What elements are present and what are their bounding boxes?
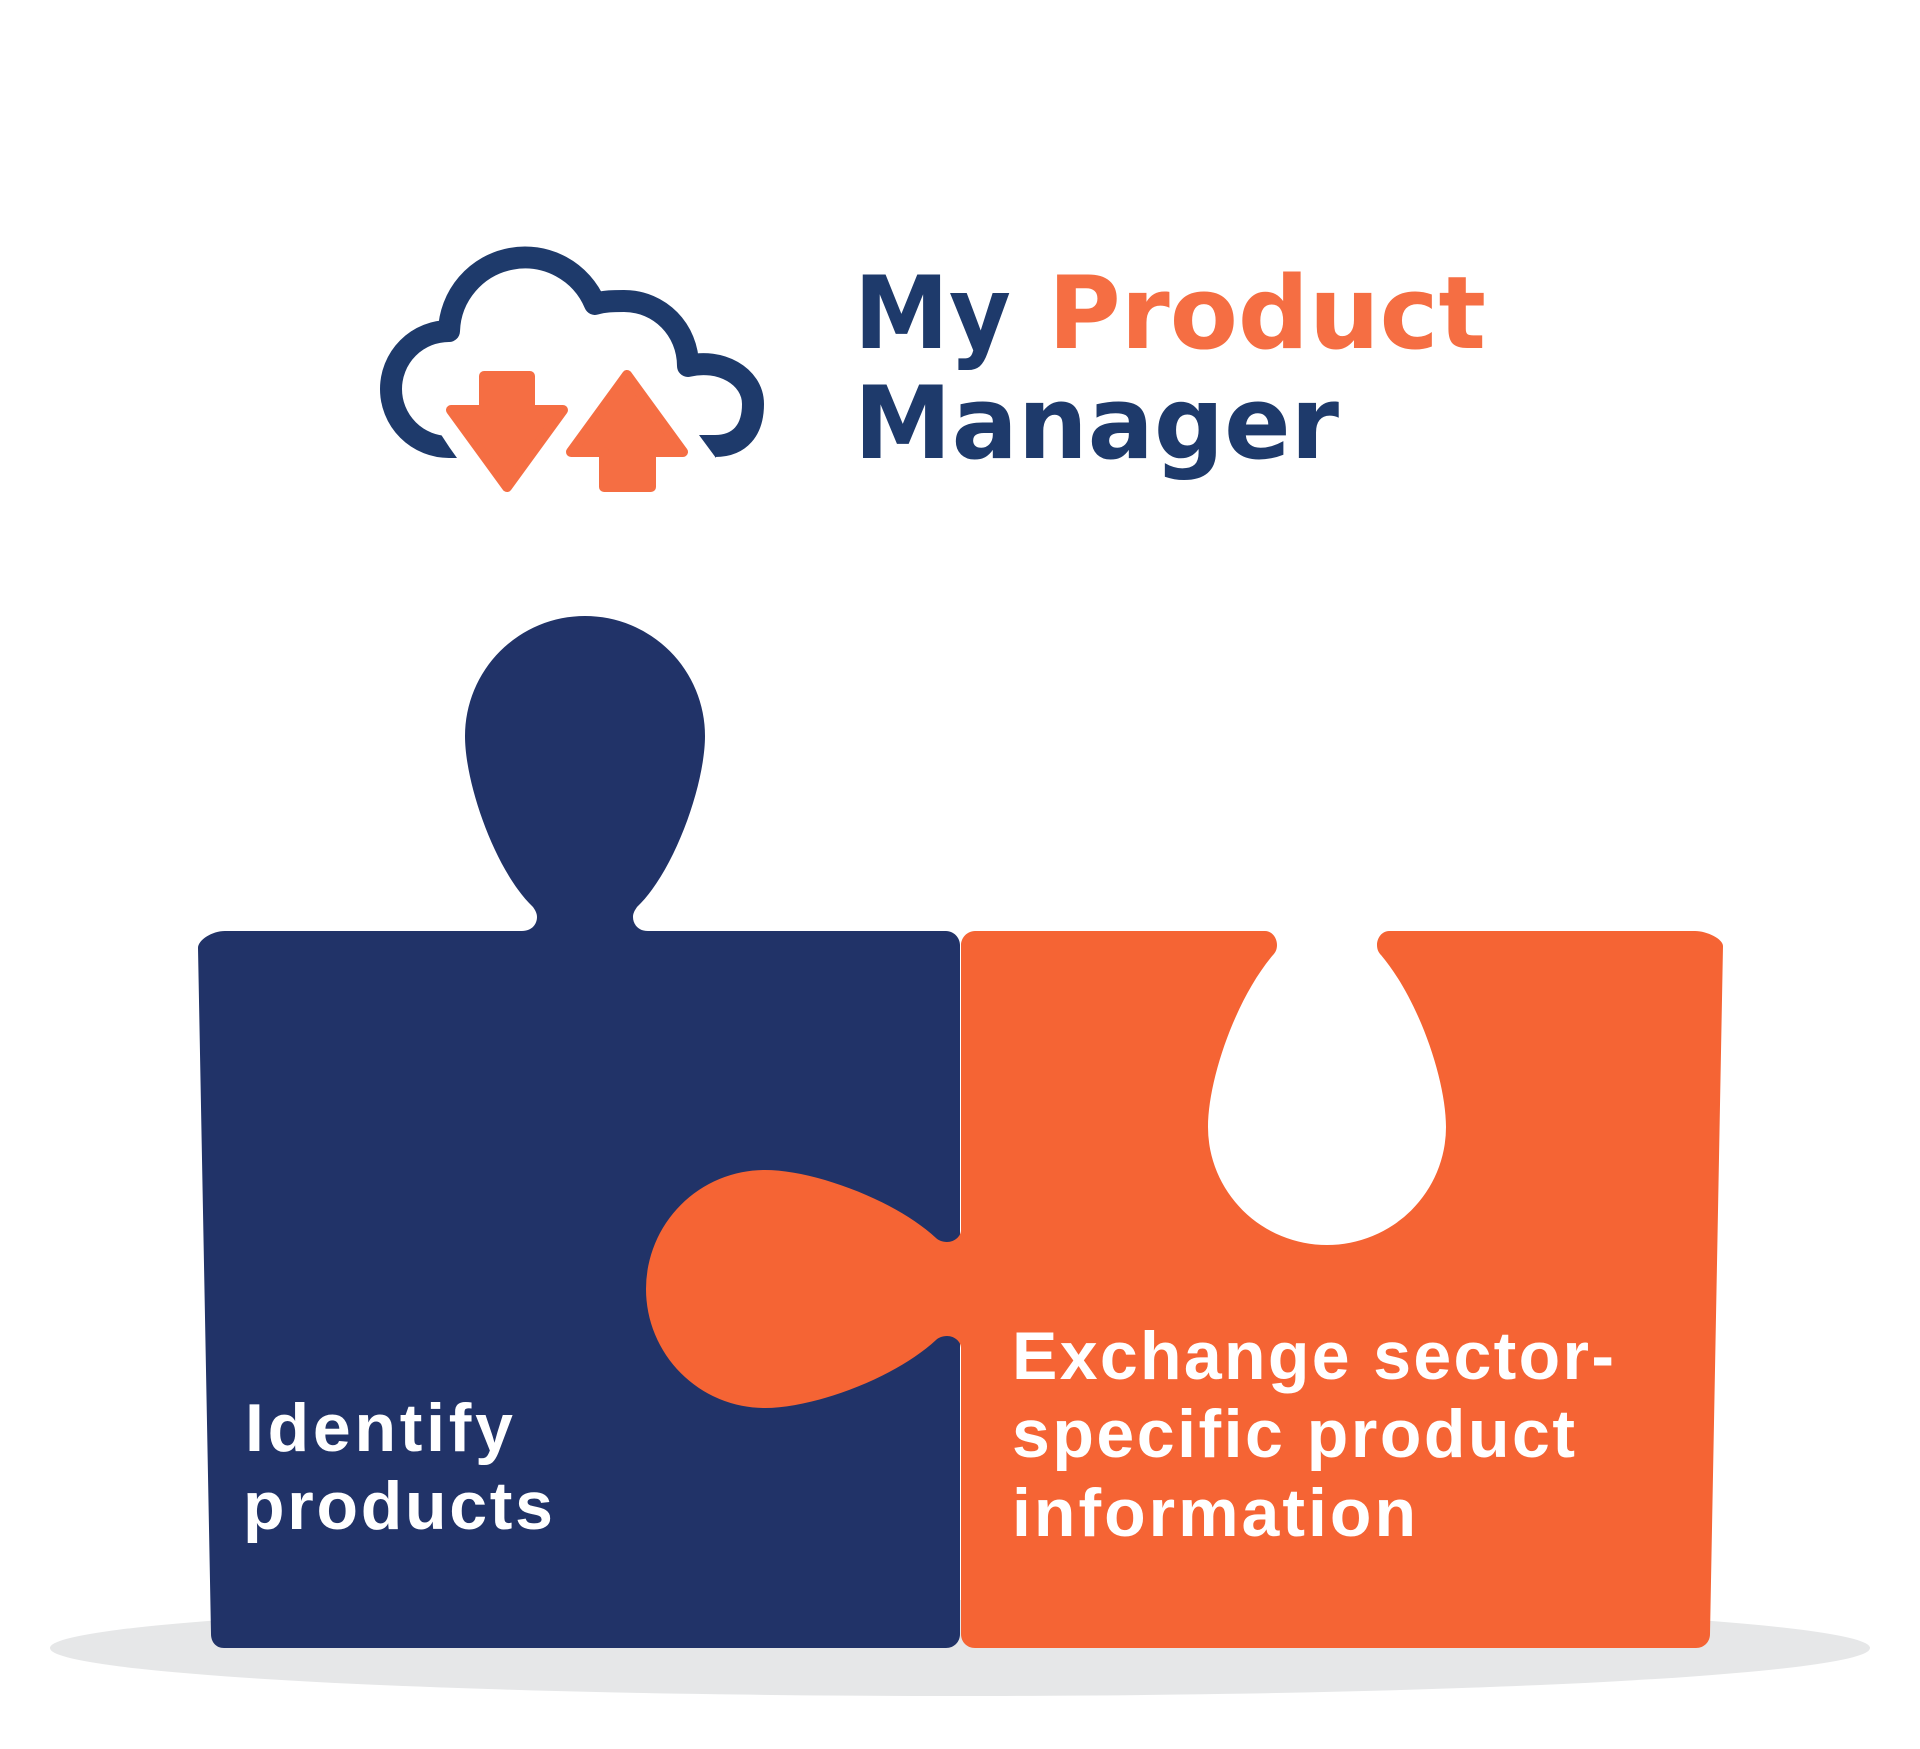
puzzle piece: blue, identify products bbox=[198, 616, 960, 1648]
ground shadow ellipse bbox=[50, 1600, 1870, 1696]
title: My Product Manager: Manager bbox=[854, 364, 1339, 482]
label: Exchange sector-specific product information: information bbox=[1012, 1475, 1416, 1551]
title: My Product Manager: My bbox=[854, 254, 1011, 372]
label: Exchange sector-specific product information: specific product bbox=[1012, 1396, 1575, 1472]
title: My Product Manager bbox=[854, 254, 1486, 482]
title: My Product Manager: Product bbox=[1048, 254, 1486, 372]
icon: download arrow bbox=[451, 376, 563, 487]
blue puzzle shape bbox=[198, 616, 960, 1648]
orange puzzle shape bbox=[646, 931, 1723, 1648]
label: Identify products bbox=[243, 1390, 553, 1544]
logo: cloud with arrows bbox=[391, 257, 753, 487]
icon: cloud outline bbox=[391, 257, 753, 458]
label: Identify products: products bbox=[243, 1468, 553, 1544]
icon: upload arrow bbox=[571, 375, 683, 487]
label: Identify products: Identify bbox=[245, 1390, 513, 1466]
label: Exchange sector-specific product information bbox=[1012, 1318, 1614, 1551]
label: Exchange sector-specific product information: Exchange sector- bbox=[1012, 1318, 1614, 1394]
puzzle piece: orange, exchange information bbox=[646, 931, 1723, 1648]
